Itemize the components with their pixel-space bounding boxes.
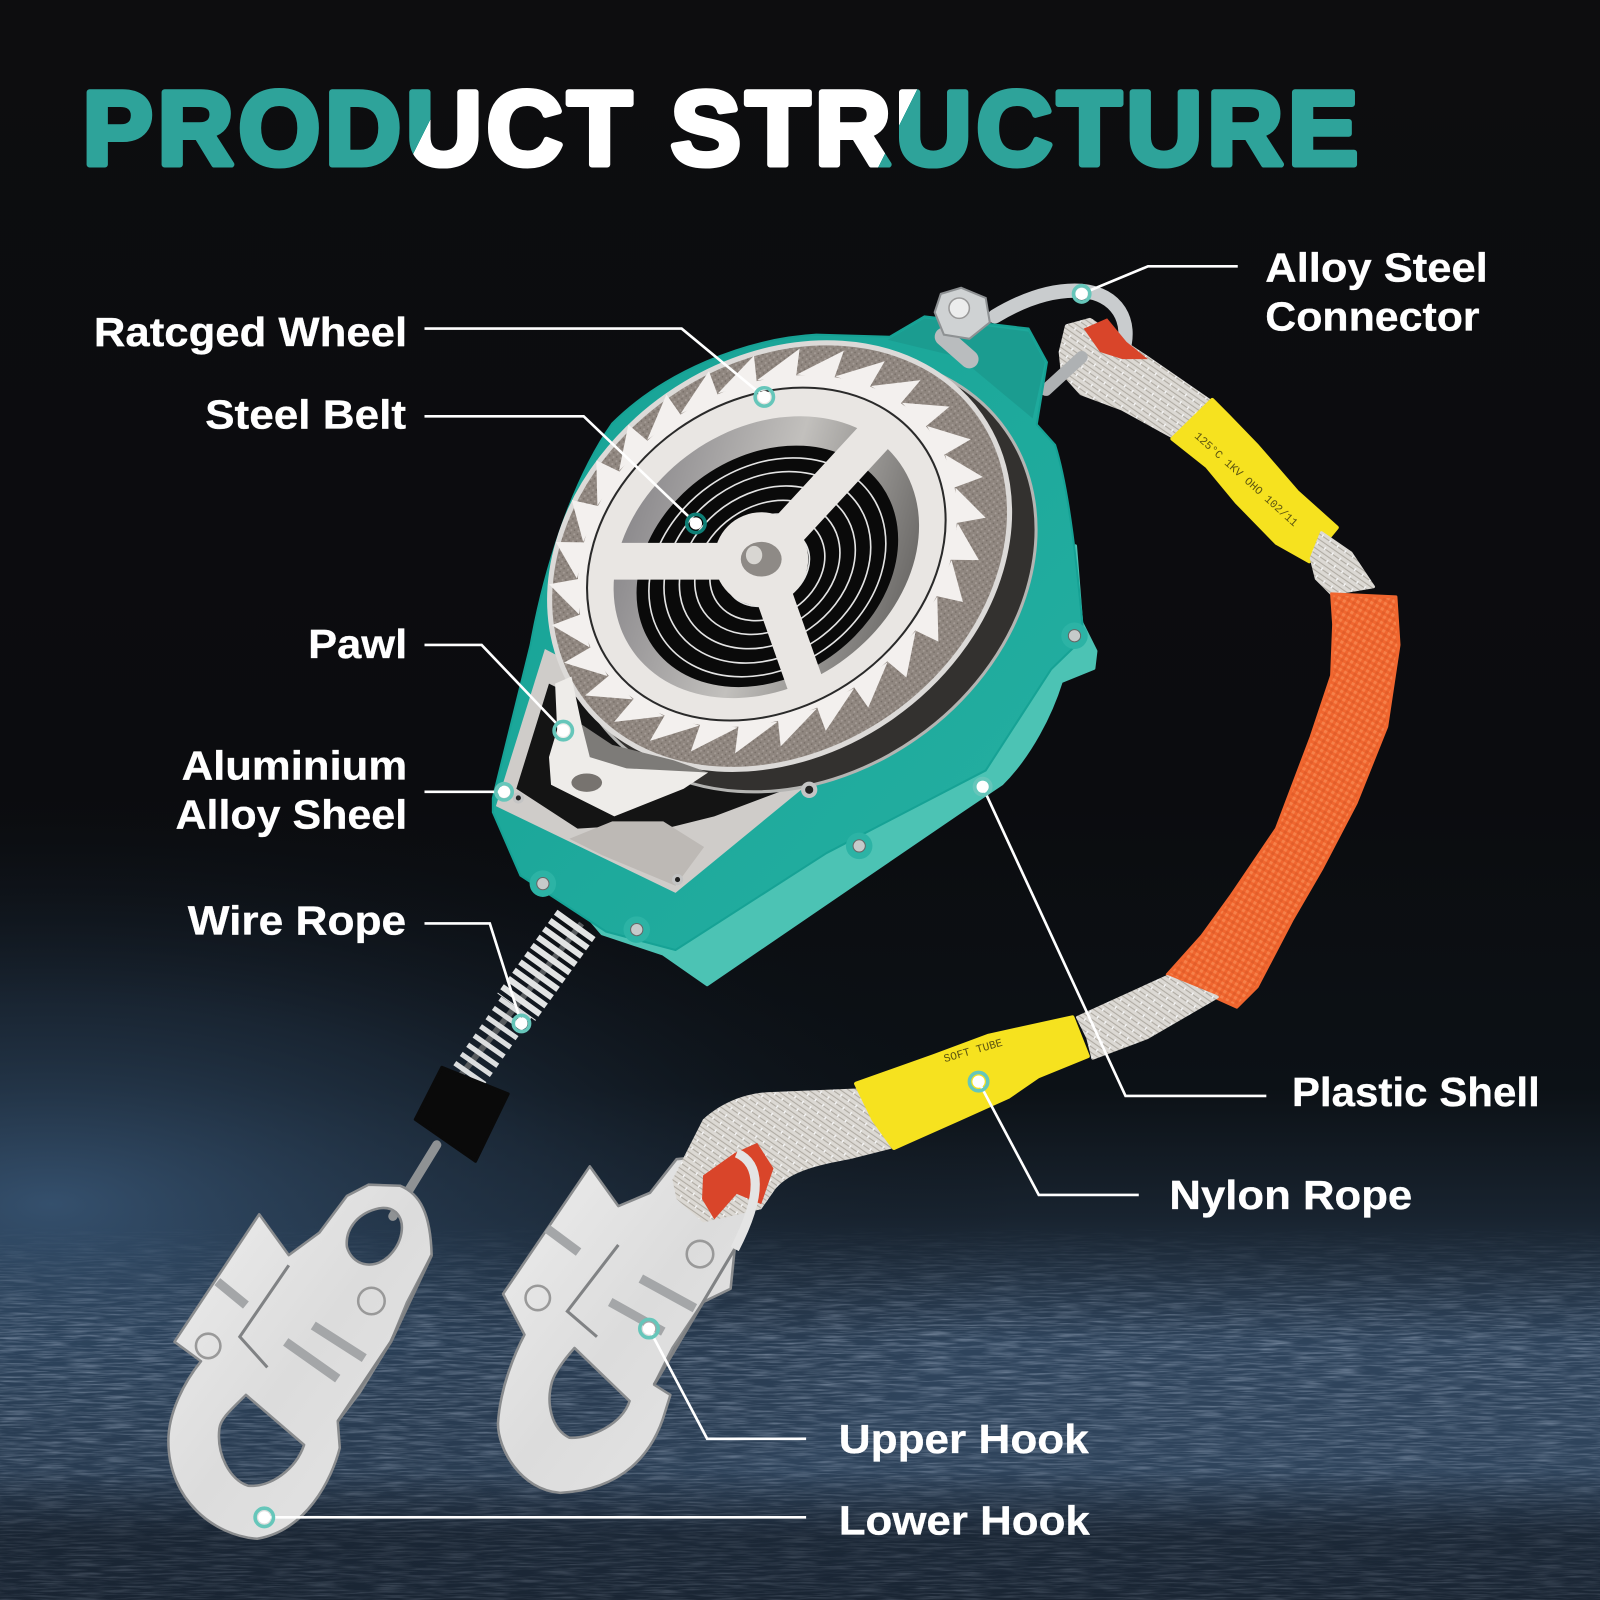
coil drum and base <box>467 255 1121 882</box>
callout: Ratcged Wheel <box>94 309 773 406</box>
callout: Aluminium Alloy Sheel: Alloy Sheel <box>176 792 407 838</box>
upper dark shell <box>493 316 1084 950</box>
rope lower mid <box>1078 977 1217 1058</box>
rope between sleeves <box>1311 533 1373 594</box>
steel cover ring, springs and spokes <box>522 319 1010 789</box>
orange webbing sleeve <box>1167 594 1399 1007</box>
nylon lanyard with sleeves <box>672 320 1399 1222</box>
spokes <box>598 427 884 698</box>
winch body shell <box>493 316 1096 985</box>
interior plate <box>496 649 806 893</box>
mount lug highlight <box>888 318 1045 418</box>
rib shading <box>547 1229 695 1332</box>
upper yellow sleeve <box>1172 400 1337 561</box>
upper yellow sleeve: 125°C 1KV OHO 102/11 <box>1191 431 1299 530</box>
pawl <box>549 677 708 816</box>
lower rope loop <box>672 1088 894 1222</box>
dark cavity <box>516 684 796 832</box>
title: PRODUCT STRUCTURE <box>83 70 1358 187</box>
callout: Lower Hook: Lower Hook <box>839 1498 1090 1544</box>
callout: Alloy Steel Connector <box>1073 245 1488 340</box>
callout: Steel Belt <box>205 392 705 533</box>
callout: Wire Rope: Wire Rope <box>188 898 406 944</box>
right snap hook <box>498 1153 761 1493</box>
callout: Nylon Rope <box>969 1072 1412 1218</box>
lower yellow sleeve: SOFT TUBE <box>943 1038 1005 1066</box>
left snap hook <box>168 1185 432 1539</box>
lower mechanism plate <box>569 821 704 886</box>
callout: Alloy Steel Connector: Alloy Steel <box>1265 245 1488 291</box>
lower lighter shell <box>571 546 1096 985</box>
callout: Pawl <box>308 621 572 740</box>
callout: Upper Hook: Upper Hook <box>839 1416 1089 1462</box>
black crimp sleeve <box>415 1067 508 1161</box>
upper rope splice <box>1061 320 1210 437</box>
callout: Plastic Shell: Plastic Shell <box>1292 1069 1540 1115</box>
background: dark studio fading to blue sea <box>0 870 1600 1600</box>
housing screws <box>514 622 1088 943</box>
rivets <box>526 1241 713 1310</box>
callout: Upper Hook <box>640 1319 1089 1462</box>
callout: Lower Hook <box>255 1498 1090 1544</box>
callout: Plastic Shell <box>974 779 1540 1115</box>
callout: Ratcged Wheel: Ratcged Wheel <box>94 309 407 355</box>
callout: Steel Belt: Steel Belt <box>205 392 407 438</box>
red thimble upper <box>1084 318 1148 359</box>
callout: Wire Rope <box>188 898 530 1032</box>
callout: Aluminium Alloy Sheel: Aluminium <box>182 743 407 789</box>
callout: Pawl: Pawl <box>308 621 407 667</box>
steel belt spring coils <box>606 413 928 722</box>
shackle bolt <box>935 288 990 359</box>
wire rope spring <box>454 923 582 1084</box>
callout: Nylon Rope: Nylon Rope <box>1169 1172 1412 1218</box>
shackle connector <box>995 291 1148 390</box>
hub hole <box>741 542 782 577</box>
pawl pivot pin <box>571 773 602 792</box>
rib shading <box>217 1282 364 1379</box>
callout: Alloy Steel Connector: Connector <box>1265 294 1480 340</box>
wire loop to hook <box>393 1145 437 1216</box>
lower rope eye and red thimble <box>672 1102 773 1249</box>
callout: Aluminium Alloy Sheel <box>176 743 512 838</box>
lower yellow sleeve <box>856 1017 1088 1148</box>
ratchet wheel <box>467 262 1068 840</box>
rivets <box>196 1288 385 1358</box>
